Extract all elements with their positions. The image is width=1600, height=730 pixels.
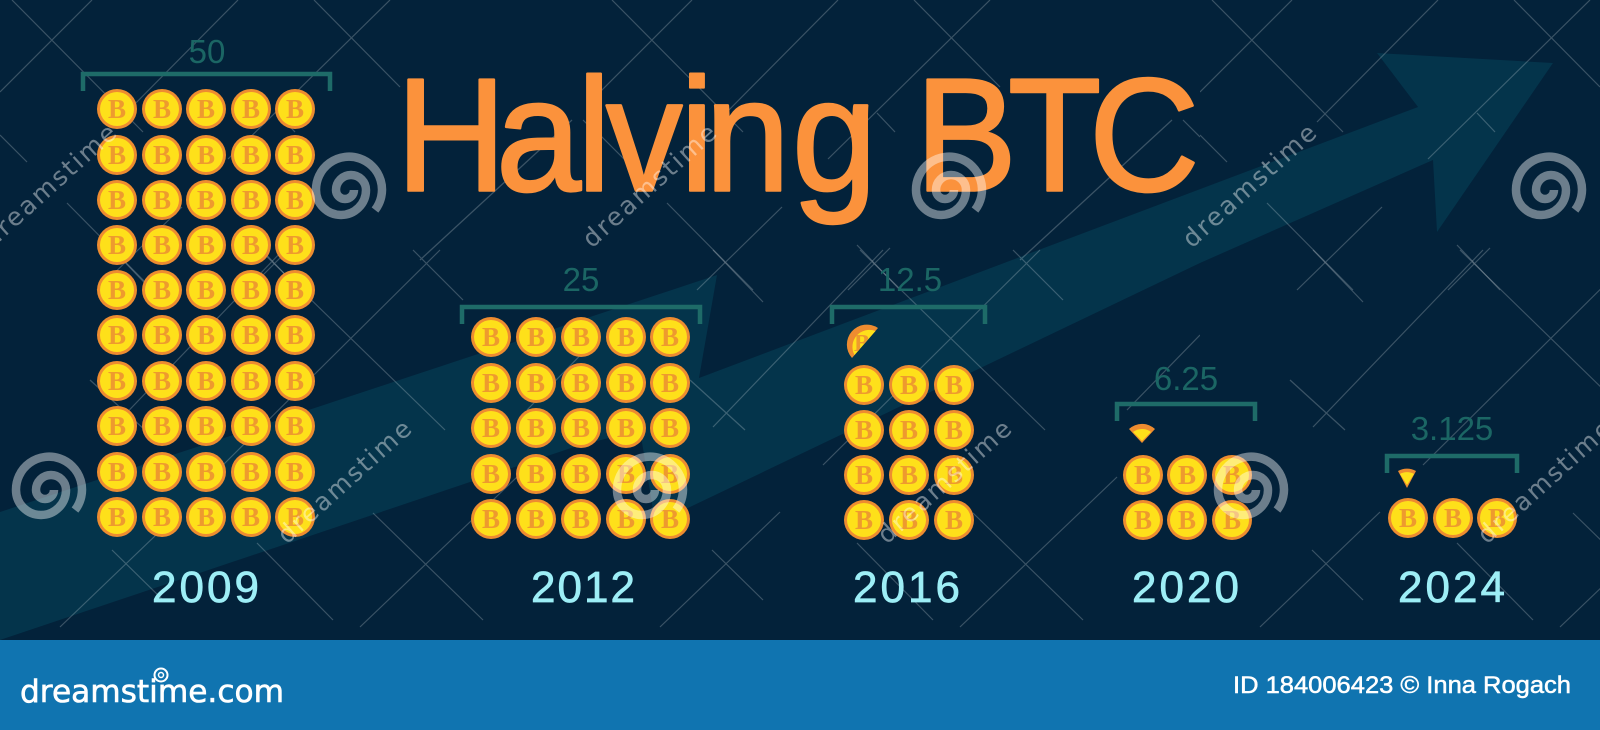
coins 2009: B (108, 230, 126, 260)
coins 2009: B (153, 230, 171, 260)
coins 2009: B (242, 366, 260, 396)
coins 2024: B (1444, 503, 1462, 533)
coins 2009: B (197, 457, 215, 487)
coins 2009: B (153, 275, 171, 305)
coins 2009: B (286, 457, 304, 487)
coins 2012: B (661, 368, 679, 398)
coins 2009: B (242, 457, 260, 487)
coins 2009: B (242, 411, 260, 441)
coins 2020: B (1134, 505, 1152, 535)
coins 2009: B (197, 366, 215, 396)
coins 2009: B (108, 185, 126, 215)
half coin 2016: B (854, 331, 870, 357)
coins 2016: B (855, 460, 873, 490)
coins 2020 (1123, 455, 1252, 540)
coins 2009: B (153, 411, 171, 441)
coins 2009: B (153, 502, 171, 532)
coins 2012: B (572, 322, 590, 352)
coins 2016: B (945, 370, 963, 400)
coins 2009: B (108, 366, 126, 396)
year 2020: 2020 (1132, 563, 1242, 612)
coins 2012: B (572, 504, 590, 534)
coins 2009: B (197, 230, 215, 260)
rising arrow (0, 53, 1553, 640)
coins 2009: B (286, 230, 304, 260)
coins 2012: B (661, 322, 679, 352)
coins 2020: B (1178, 460, 1196, 490)
coins 2024 (1388, 498, 1517, 538)
coins 2009: B (153, 366, 171, 396)
footer logo: dreamstime.com (20, 674, 284, 710)
coins 2009: B (197, 185, 215, 215)
value label 3.125: 3.125 (1411, 410, 1493, 447)
coins 2016: B (900, 370, 918, 400)
column 2024 (1387, 410, 1517, 612)
coins 2009: B (286, 140, 304, 170)
coins 2012: B (527, 413, 545, 443)
coins 2012: B (482, 322, 500, 352)
coins 2009: B (286, 185, 304, 215)
coins 2009: B (197, 94, 215, 124)
coins 2009: B (108, 457, 126, 487)
coins 2012: B (617, 459, 635, 489)
coins 2009: B (197, 320, 215, 350)
coins 2012: B (572, 459, 590, 489)
coins 2009: B (286, 94, 304, 124)
coins 2012: B (617, 413, 635, 443)
coins 2016: B (855, 505, 873, 535)
coins 2009: B (108, 411, 126, 441)
coins 2012: B (527, 322, 545, 352)
value label 12.5: 12.5 (878, 261, 942, 298)
coins 2009: B (286, 502, 304, 532)
coins 2012: B (661, 413, 679, 443)
coins 2016: B (900, 505, 918, 535)
bracket 2020 (1117, 404, 1255, 421)
coins 2016 (844, 365, 974, 540)
coins 2009: B (242, 185, 260, 215)
footer bar (0, 640, 1600, 730)
title: Halving BTC (396, 46, 1199, 225)
coins 2009: B (242, 320, 260, 350)
column 2016 (832, 261, 985, 612)
coins 2012: B (617, 504, 635, 534)
half coin 2016 (847, 325, 878, 358)
coins 2016: B (900, 460, 918, 490)
coins 2016: B (855, 370, 873, 400)
coins 2009: B (242, 502, 260, 532)
coins 2024: B (1488, 503, 1506, 533)
coins 2016: B (945, 460, 963, 490)
bracket 2012 (462, 307, 700, 324)
coins 2009: B (242, 275, 260, 305)
footer credit: ID 184006423 © Inna Rogach (1233, 672, 1571, 699)
watermark (0, 118, 1600, 549)
coins 2009: B (108, 275, 126, 305)
coins 2009: B (197, 411, 215, 441)
coins 2009: B (286, 366, 304, 396)
coins 2009: B (153, 185, 171, 215)
coins 2009: B (108, 140, 126, 170)
year 2009: 2009 (152, 563, 262, 612)
coins 2009: B (108, 502, 126, 532)
coins 2012: B (661, 459, 679, 489)
coins 2016: B (855, 415, 873, 445)
coins 2009: B (153, 457, 171, 487)
watermark: dreamstime (271, 414, 417, 549)
coins 2009: B (242, 140, 260, 170)
watermark: dreamstime (871, 414, 1017, 549)
coins 2012: B (661, 504, 679, 534)
coins 2012: B (617, 322, 635, 352)
coins 2009: B (153, 320, 171, 350)
coins 2012: B (617, 368, 635, 398)
coins 2012: B (572, 368, 590, 398)
column 2020 (1117, 360, 1255, 612)
coin wedge 2024 (1398, 469, 1416, 488)
coins 2009: B (108, 94, 126, 124)
coins 2009 (97, 89, 315, 537)
coins 2020: B (1178, 505, 1196, 535)
coins 2012: B (482, 504, 500, 534)
value label 6.25: 6.25 (1154, 360, 1218, 397)
coins 2012: B (482, 368, 500, 398)
coins 2016: B (945, 505, 963, 535)
coins 2012: B (527, 504, 545, 534)
coins 2020: B (1223, 460, 1241, 490)
coins 2012: B (572, 413, 590, 443)
coins 2016: B (945, 415, 963, 445)
coins 2012: B (527, 368, 545, 398)
coins 2009: B (242, 94, 260, 124)
coins 2009: B (286, 320, 304, 350)
bracket 2024 (1387, 456, 1517, 473)
coins 2012: B (482, 459, 500, 489)
coins 2009: B (108, 320, 126, 350)
column 2012 (462, 261, 700, 612)
coins 2009: B (286, 411, 304, 441)
coins 2009: B (197, 140, 215, 170)
coins 2009: B (153, 140, 171, 170)
coin wedge 2020 (1129, 424, 1155, 443)
coins 2009: B (242, 230, 260, 260)
year 2024: 2024 (1398, 563, 1508, 612)
year 2012: 2012 (531, 563, 637, 612)
watermark: dreamstime (576, 118, 722, 253)
value label 50: 50 (189, 33, 225, 70)
coins 2009: B (197, 275, 215, 305)
year 2016: 2016 (853, 563, 963, 612)
watermark: dreamstime (1176, 118, 1322, 253)
bracket 2009 (83, 74, 330, 91)
coins 2020: B (1134, 460, 1152, 490)
value label 25: 25 (563, 261, 599, 298)
coins 2012 (471, 317, 690, 539)
column 2009 (83, 33, 330, 612)
coins 2012: B (527, 459, 545, 489)
coins 2016: B (900, 415, 918, 445)
bracket 2016 (832, 307, 985, 324)
coins 2012: B (482, 413, 500, 443)
coins 2024: B (1399, 503, 1417, 533)
coins 2009: B (197, 502, 215, 532)
coins 2020: B (1223, 505, 1241, 535)
coins 2009: B (286, 275, 304, 305)
coins 2009: B (153, 94, 171, 124)
